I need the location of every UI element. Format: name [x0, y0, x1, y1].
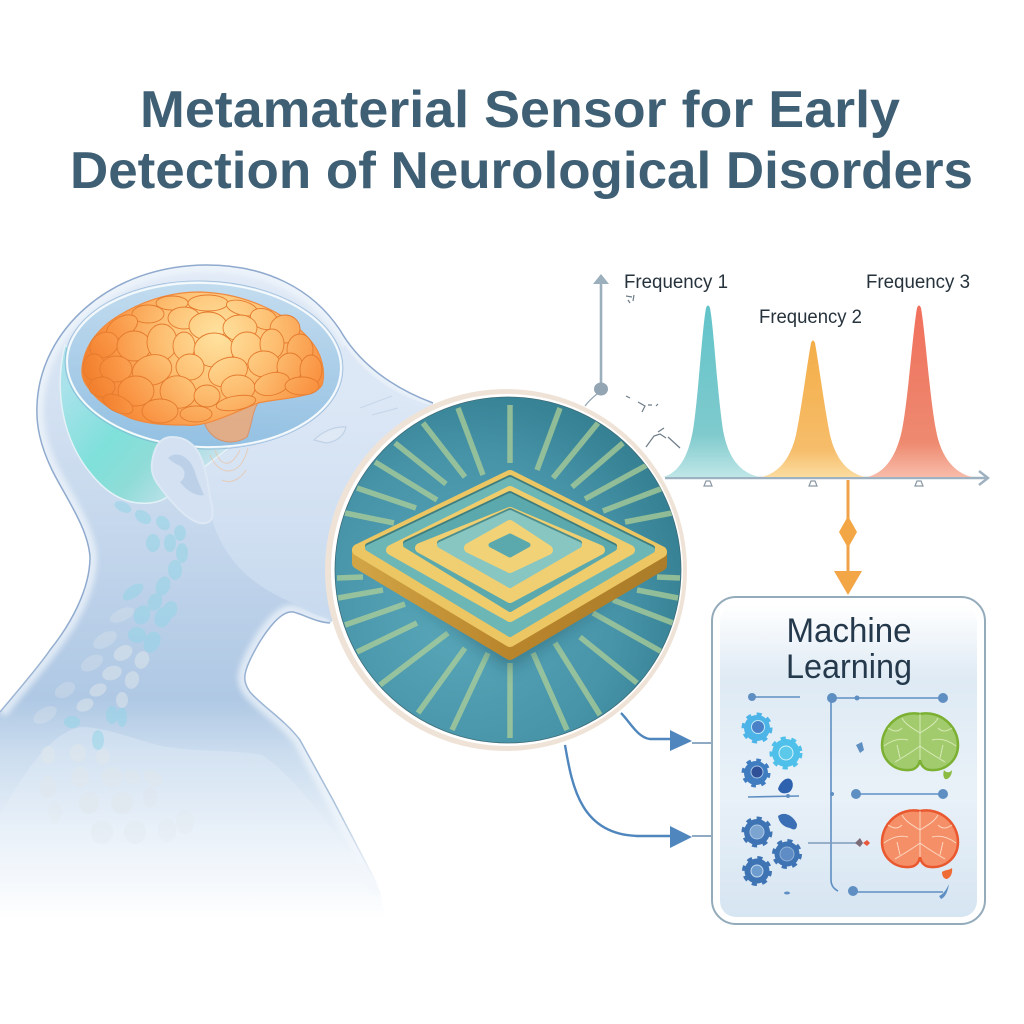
glass skull cup with teal fluid: [60, 345, 230, 503]
glassy rim along silhouette: [0, 265, 433, 890]
gears: [744, 714, 800, 884]
glass dome around brain: [62, 276, 346, 454]
peak 2 yellow: [762, 340, 865, 477]
ear: [152, 437, 213, 523]
brain illustration: [82, 292, 324, 442]
blob node upper: [778, 779, 793, 793]
gear bottom: [744, 858, 770, 884]
blue gear row: [744, 818, 770, 846]
peak 1 teal: [663, 306, 760, 477]
flow nodes: [748, 693, 949, 899]
human head and torso figure: [0, 265, 440, 920]
blob node lower: [778, 814, 797, 829]
central gold ring: [469, 525, 548, 568]
face area: [200, 345, 430, 622]
panel heading: Machine: [786, 612, 912, 650]
outer channel shadow: [368, 478, 652, 632]
second teal channel: [406, 496, 614, 609]
outer gold frame: [358, 476, 661, 641]
third gold ring: [420, 512, 600, 598]
panel heading: [786, 612, 912, 686]
peak 3 red: [867, 306, 972, 477]
frequency labels: Frequency 1: [624, 272, 728, 293]
machine learning panel: [712, 597, 985, 924]
chip side wall: [358, 550, 661, 654]
body silhouette: [0, 265, 440, 920]
title: Detection of Neurological Disorders: [70, 142, 973, 200]
stray chart marks: [626, 295, 680, 448]
frequency chart: [585, 272, 988, 486]
faint nerve fibres under brain: [210, 448, 248, 482]
connector: sensor to second ML input: [565, 745, 712, 848]
cyan gear: [772, 738, 800, 768]
connector: sensor to first ML input: [621, 713, 712, 751]
y axis: [585, 274, 609, 406]
spine beads: [30, 499, 194, 844]
title: Metamaterial Sensor for Early: [140, 81, 900, 139]
orange double arrow: [834, 480, 862, 595]
x axis: [665, 471, 988, 485]
radiating rays: [337, 405, 680, 738]
frequency labels: Frequency 2: [759, 307, 862, 328]
eye and brow: [314, 396, 398, 443]
light blue gear: [744, 714, 770, 742]
orange at-risk brain: [882, 810, 958, 879]
body outline: [0, 265, 433, 890]
metamaterial sensor medallion: [325, 389, 687, 751]
small classifier marker: [855, 838, 870, 847]
third teal channel: [440, 513, 579, 585]
second gold ring: [391, 491, 630, 617]
cerebellum and stem: [205, 400, 258, 442]
title: [70, 81, 973, 200]
third channel shadow: [440, 511, 579, 583]
frequency labels: [624, 272, 970, 328]
outer teal channel: [368, 480, 652, 634]
shoulder overlay: [0, 727, 385, 920]
gear right: [774, 841, 800, 867]
panel heading: Learning: [786, 648, 912, 686]
central teal window: [491, 536, 528, 555]
tick marks: [704, 481, 923, 486]
green healthy brain: [882, 713, 958, 779]
flow lines: [748, 697, 943, 892]
brain gyri: [83, 295, 322, 423]
cerebrum outline: [82, 292, 324, 425]
gold chip: [358, 476, 661, 654]
frequency labels: Frequency 3: [866, 272, 970, 293]
chip shadow: [400, 590, 625, 670]
second channel shadow: [406, 494, 614, 607]
dark blue gear: [744, 760, 768, 786]
